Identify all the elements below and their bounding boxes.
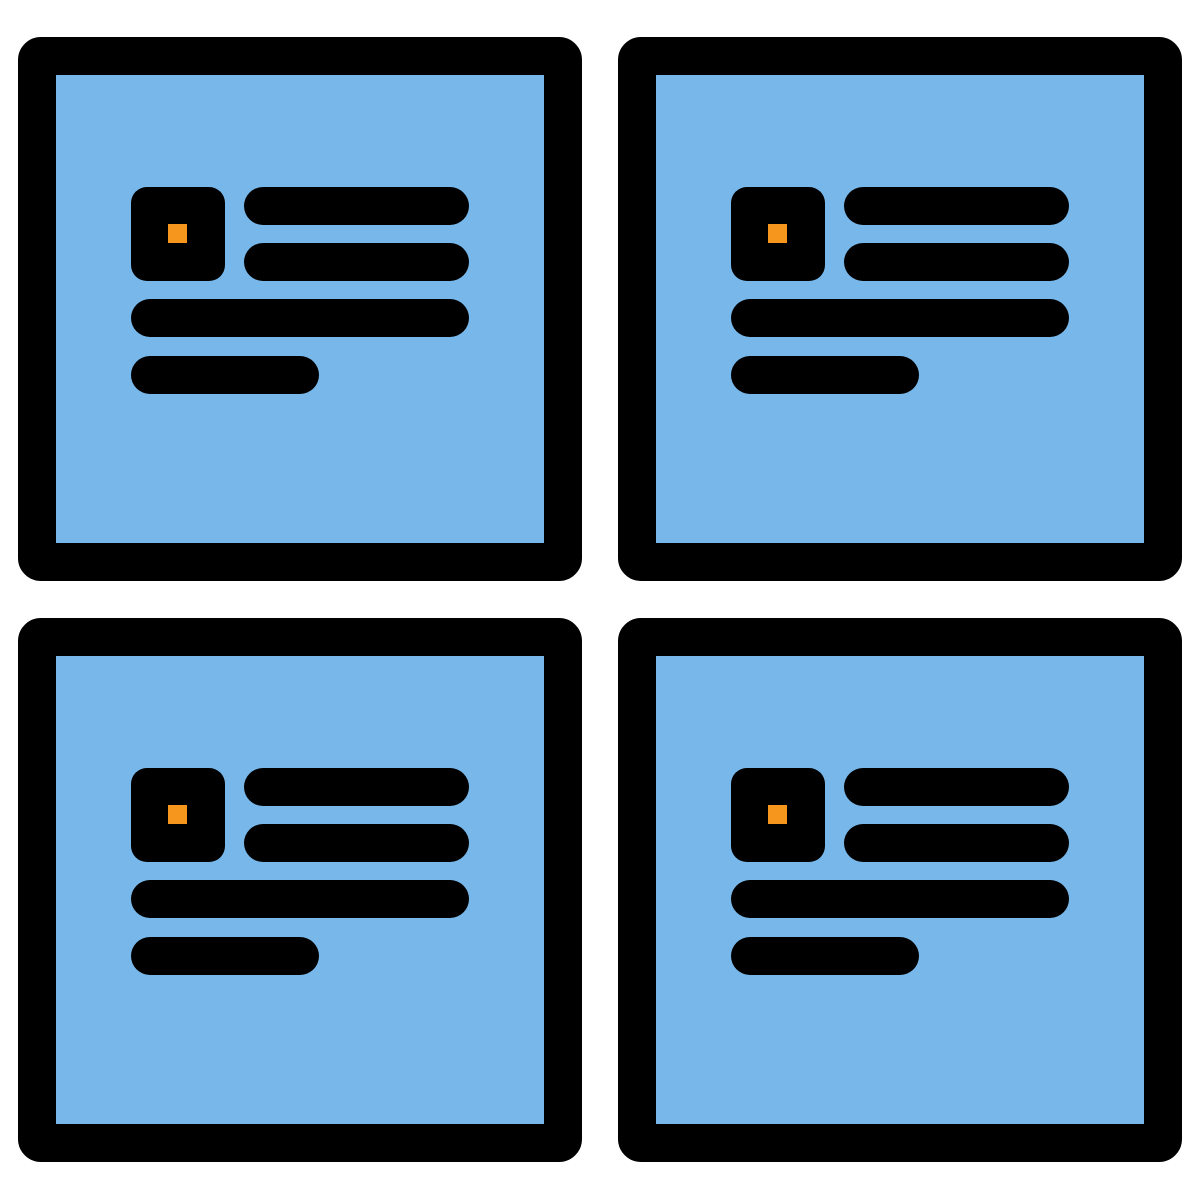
panel: bottom right [637, 637, 1163, 1143]
panel: top right [637, 56, 1163, 562]
panel: top left [37, 56, 563, 562]
panel: bottom left [37, 637, 563, 1143]
